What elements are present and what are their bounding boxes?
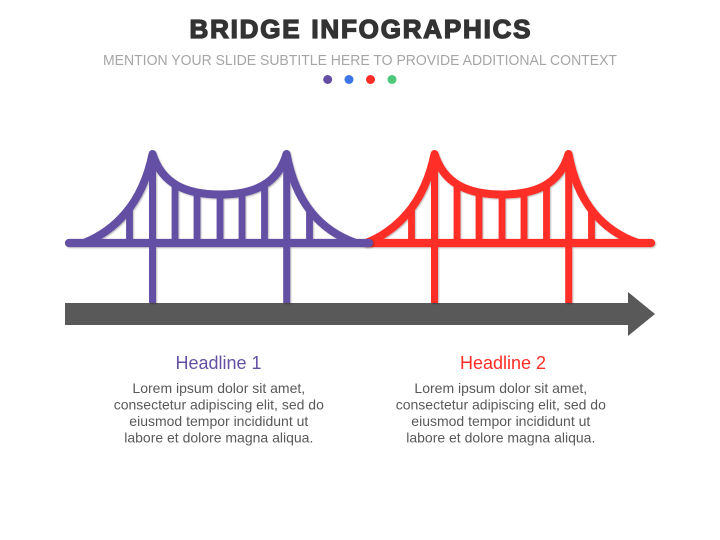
red bridge — [366, 154, 651, 303]
headline 1: Headline 1 — [175, 353, 262, 373]
body text 1: consectetur adipiscing elit, sed do — [114, 396, 324, 412]
red bridge towers — [434, 156, 569, 303]
purple bridge cables — [84, 154, 356, 243]
body text 1: eiusmod tempor incididunt ut — [129, 413, 308, 429]
red bridge cables — [366, 154, 638, 243]
decorative colour dots — [323, 75, 396, 84]
body text 1: Lorem ipsum dolor sit amet, — [132, 380, 305, 396]
body text 2: Lorem ipsum dolor sit amet, — [414, 380, 587, 396]
body text 2: labore et dolore magna aliqua. — [406, 430, 595, 446]
red bridge deck — [366, 239, 651, 247]
timeline arrow — [65, 292, 655, 336]
purple bridge hangers — [130, 184, 310, 243]
headline 2: Headline 2 — [460, 353, 546, 373]
subtitle: MENTION YOUR SLIDE SUBTITLE HERE TO PROVIDE ADDITIONAL CONTEXT — [103, 53, 617, 69]
title: BRIDGE INFOGRAPHICS — [190, 14, 530, 44]
purple bridge deck — [69, 239, 369, 247]
purple bridge — [69, 154, 369, 303]
body text 2: eiusmod tempor incididunt ut — [411, 413, 590, 429]
body text 1: labore et dolore magna aliqua. — [124, 430, 313, 446]
purple bridge towers — [152, 156, 287, 303]
body text 2: consectetur adipiscing elit, sed do — [396, 396, 606, 412]
red bridge hangers — [412, 184, 592, 243]
